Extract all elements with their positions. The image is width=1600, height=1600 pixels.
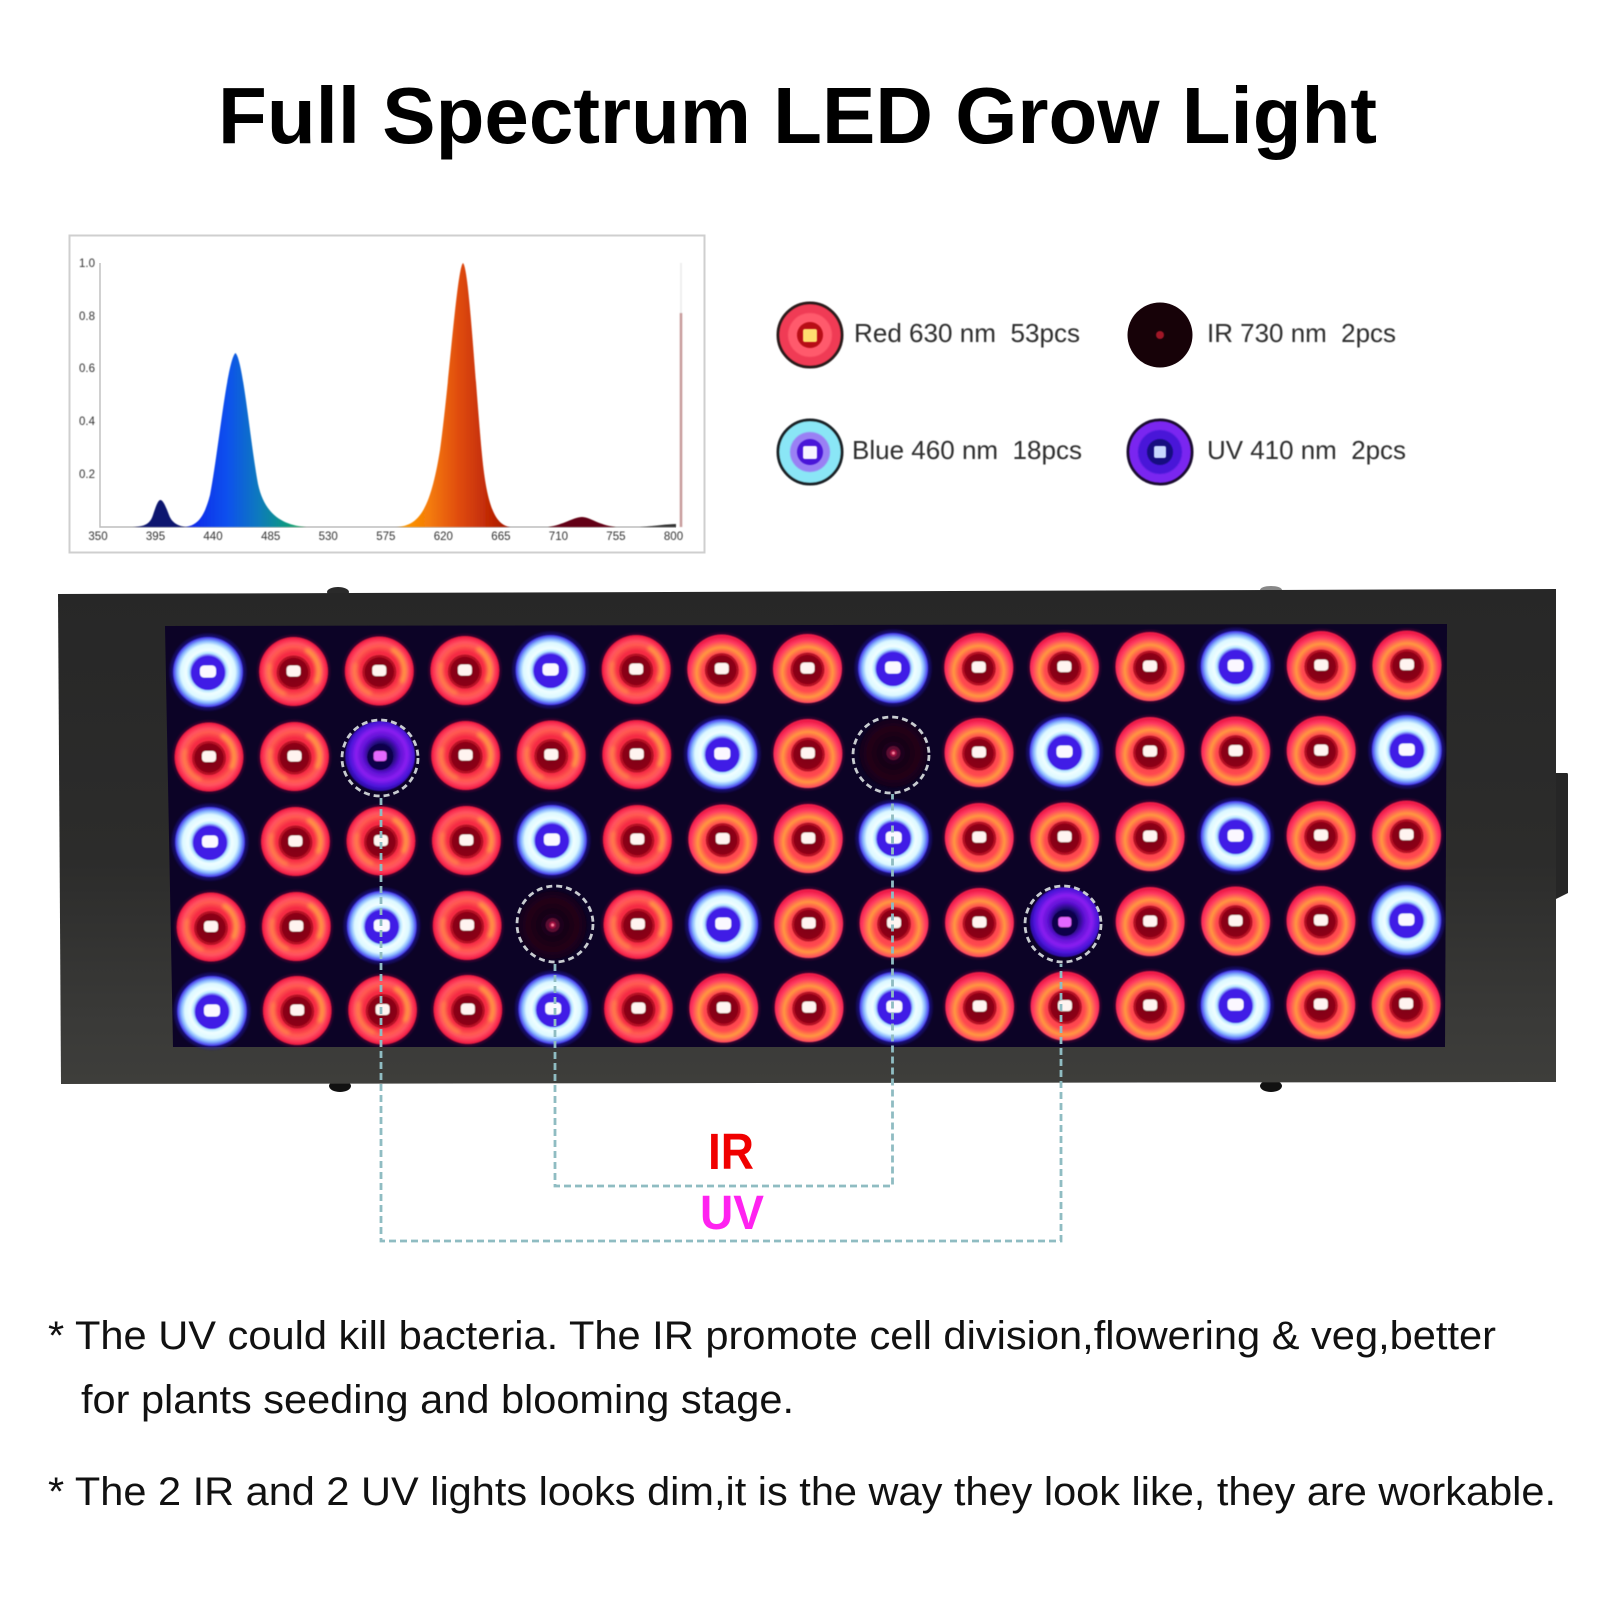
chart axes [100, 263, 676, 527]
legend [778, 302, 1406, 484]
peak: UV [130, 500, 186, 527]
note 1 [48, 1314, 1496, 1422]
peak: IR bump [548, 517, 616, 527]
title: Full Spectrum LED Grow Light [218, 71, 1377, 160]
housing [58, 589, 1556, 1084]
dashed highlight circles [342, 717, 1101, 962]
y axis labels [79, 258, 96, 481]
right edge line [680, 263, 682, 313]
x axis labels [88, 531, 683, 543]
panel: LED grow light [58, 586, 1568, 1092]
label: IR: IR [708, 1123, 754, 1180]
note 1: for plants seeding and blooming stage. [81, 1378, 794, 1422]
y axis labels: 0.6 [79, 363, 95, 375]
peak: blue [184, 353, 306, 527]
x axis labels: 575 [376, 531, 395, 543]
x axis labels: 710 [549, 531, 568, 543]
LED row 4 [173, 880, 1446, 967]
x axis labels: 665 [491, 531, 510, 543]
y axis labels: 0.4 [79, 416, 96, 428]
y axis labels: 0.2 [79, 469, 95, 481]
x axis labels: 395 [146, 531, 165, 543]
LED row 2 [171, 710, 1447, 797]
note 2: * The 2 IR and 2 UV lights looks dim,it is the way they look like, they are workable. [48, 1470, 1556, 1514]
side connector [1556, 773, 1568, 899]
y axis labels: 1.0 [79, 258, 95, 270]
housing knobs [327, 586, 1282, 1092]
x axis labels: 350 [88, 531, 108, 543]
x axis labels: 485 [261, 531, 280, 543]
note 1: * The UV could kill bacteria. The IR promote cell division,flowering & veg,better [48, 1314, 1496, 1358]
x axis labels: 530 [319, 531, 338, 543]
panel: spectrum chart [70, 236, 704, 552]
LED row 5 [172, 964, 1444, 1051]
label: UV: UV [700, 1187, 764, 1240]
x axis labels: 800 [664, 531, 683, 543]
x axis labels: 755 [606, 531, 625, 543]
x axis labels: 620 [434, 531, 453, 543]
peak: red [396, 263, 510, 527]
legend: IR: IR 730 nm 2pcs [1207, 318, 1396, 348]
legend: blue [778, 420, 1082, 484]
LED row 1 [168, 625, 1445, 712]
spectrum curves [130, 263, 681, 527]
legend: red: Red 630 nm 53pcs [854, 318, 1080, 348]
legend: red [778, 303, 1080, 367]
legend: UV: UV 410 nm 2pcs [1207, 435, 1406, 465]
connector: IR [555, 794, 892, 1186]
tail at 800nm [640, 524, 676, 527]
legend: blue: Blue 460 nm 18pcs [852, 435, 1082, 465]
y axis labels: 0.8 [79, 311, 95, 323]
legend: UV [1128, 420, 1406, 484]
connector: UV [381, 798, 1061, 1241]
LED panel background [165, 624, 1447, 1047]
notes [48, 1314, 1556, 1514]
x axis labels: 440 [203, 531, 223, 543]
legend: IR [1128, 302, 1396, 368]
LED row 3 [170, 795, 1445, 882]
